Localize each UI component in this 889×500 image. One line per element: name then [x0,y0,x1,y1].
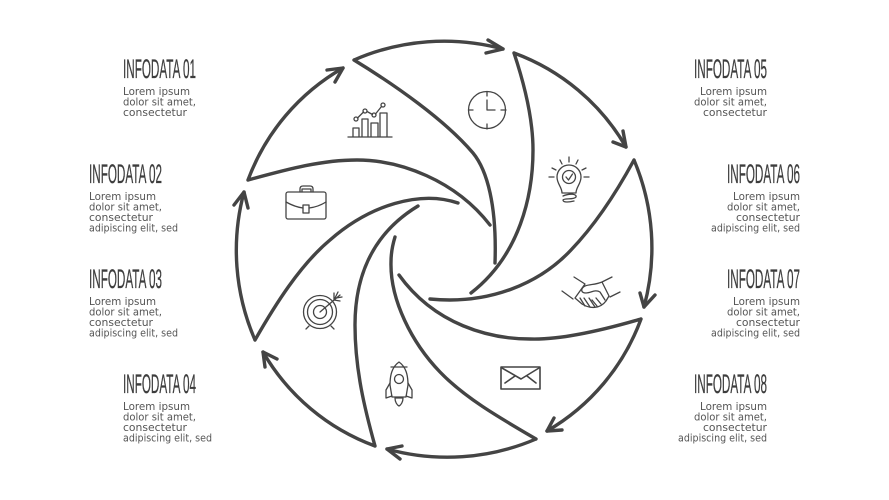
text block: infodata 08 [678,369,768,444]
text block: infodata 04: Lorem ipsum [123,401,190,413]
infographic canvas: INFODATA 08 [694,369,767,399]
blade 4 with arrow [263,206,418,446]
blade 1 with arrow [354,40,503,263]
text block: infodata 02: Lorem ipsum [89,191,156,203]
icon: handshake [562,277,620,307]
text block: infodata 01: Lorem ipsum [123,86,190,98]
icon: envelope [501,367,540,389]
blade 8 with arrow [387,237,536,459]
icon: light bulb [549,157,589,202]
text block: infodata 03 [89,264,178,340]
text block: infodata 04: INFODATA 04 [123,369,196,399]
text block: infodata 06 [711,159,801,234]
icon: target [304,292,342,329]
text block: infodata 05: consectetur [703,107,768,119]
text block: infodata 07 [711,264,801,340]
infographic canvas: INFODATA 05 [694,54,767,84]
icon: briefcase [286,186,326,219]
text block: infodata 08: dolor sit amet, [694,412,767,424]
text block: infodata 02: INFODATA 02 [89,159,162,189]
text block: infodata 02 [89,159,178,234]
text block: infodata 03: INFODATA 03 [89,264,162,294]
text block: infodata 04: dolor sit amet, [123,412,196,424]
text block: infodata 01 [123,54,196,119]
icon: rocket [386,362,412,406]
text block: infodata 07: adipiscing elit, sed [711,328,800,340]
blade 3 with arrow [234,192,458,340]
text block: infodata 06: Lorem ipsum [733,191,800,203]
text block: infodata 05 [694,54,768,119]
text block: infodata 06: adipiscing elit, sed [711,222,800,234]
text block: infodata 02: adipiscing elit, sed [89,222,178,234]
text block: infodata 03: Lorem ipsum [89,296,156,308]
text block: infodata 01: consectetur [123,107,188,119]
text block: infodata 03: consectetur [89,317,154,329]
infographic canvas: INFODATA 01 [123,54,196,84]
text block: infodata 07: consectetur [736,317,801,329]
text block: infodata 02: consectetur [89,212,154,224]
icon: clock [468,92,506,129]
text block: infodata 08: Lorem ipsum [700,401,767,413]
text block: infodata 08: adipiscing elit, sed [678,432,767,444]
text block: infodata 04 [123,369,212,444]
spiral diagram [234,40,655,459]
text block: infodata 07: dolor sit amet, [727,306,800,318]
text block: infodata 02: dolor sit amet, [89,202,162,214]
icon: bar chart [348,103,392,137]
text block: infodata 04: adipiscing elit, sed [123,432,212,444]
text block: infodata 07: Lorem ipsum [733,296,800,308]
text block: infodata 03: adipiscing elit, sed [89,328,178,340]
blade 2 with arrow [248,68,490,225]
text block: infodata 01: dolor sit amet, [123,96,196,108]
text block: infodata 05: Lorem ipsum [700,86,767,98]
text block: infodata 03: dolor sit amet, [89,306,162,318]
text block: infodata 08: consectetur [703,422,768,434]
blade 7 with arrow [399,275,641,431]
text block: infodata 04: consectetur [123,422,188,434]
blade 5 with arrow [471,53,626,293]
text block: infodata 06: dolor sit amet, [727,202,800,214]
blade 6 with arrow [430,160,655,307]
text block: infodata 05: dolor sit amet, [694,96,767,108]
text block: infodata 06: consectetur [736,212,801,224]
